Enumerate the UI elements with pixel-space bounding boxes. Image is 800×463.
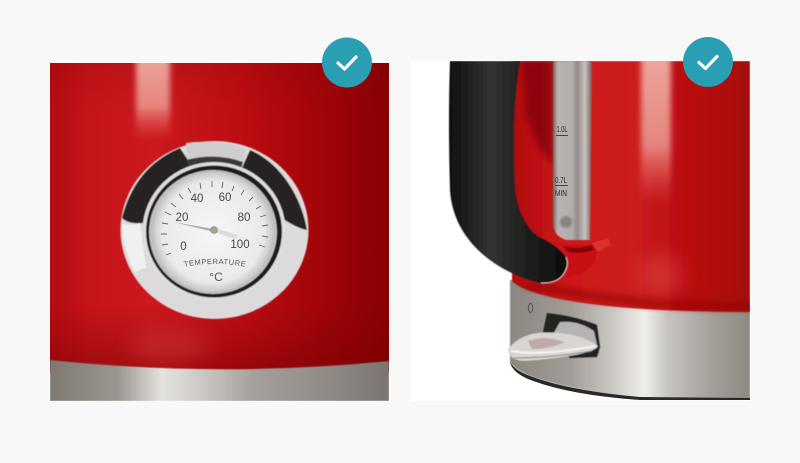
dial numbers: 20 — [176, 212, 188, 224]
red kettle body — [50, 55, 389, 373]
panel: temperature gauge photo — [50, 55, 389, 401]
degree symbol: °C — [209, 270, 223, 284]
power lever — [508, 313, 600, 361]
needle — [173, 222, 238, 239]
infographic: kettle feature photos — [50, 37, 750, 401]
red handle collar — [563, 238, 611, 273]
dial face — [154, 172, 272, 292]
icon: check badge left — [322, 38, 372, 88]
dial numbers: 0 — [180, 241, 187, 253]
panel: handle and water gauge photo — [448, 61, 750, 400]
dial numbers — [176, 192, 250, 253]
level mark 1.0L — [556, 125, 568, 136]
red kettle body — [512, 55, 750, 312]
power symbol — [528, 304, 533, 312]
black handle — [449, 61, 567, 283]
dial numbers: 60 — [219, 192, 231, 204]
chrome bezel — [120, 141, 308, 319]
white photo background — [411, 61, 750, 401]
water level window — [553, 61, 592, 240]
icon: check badge right — [683, 37, 733, 87]
dial numbers: 100 — [230, 239, 250, 251]
tick marks — [161, 181, 268, 255]
level mark 0.7L MIN: 0.7L — [555, 176, 567, 185]
level mark 0.7L MIN — [555, 177, 568, 196]
dial numbers: 80 — [238, 212, 250, 224]
temperature label: TEMPERATURE — [184, 258, 246, 267]
stainless steel base — [510, 280, 750, 400]
dial numbers: 40 — [191, 193, 203, 205]
level mark 0.7L MIN: MIN — [555, 189, 567, 198]
gauge dial — [120, 140, 310, 320]
stainless steel base — [50, 360, 389, 401]
level mark 1.0L: 1.0L — [556, 125, 568, 134]
